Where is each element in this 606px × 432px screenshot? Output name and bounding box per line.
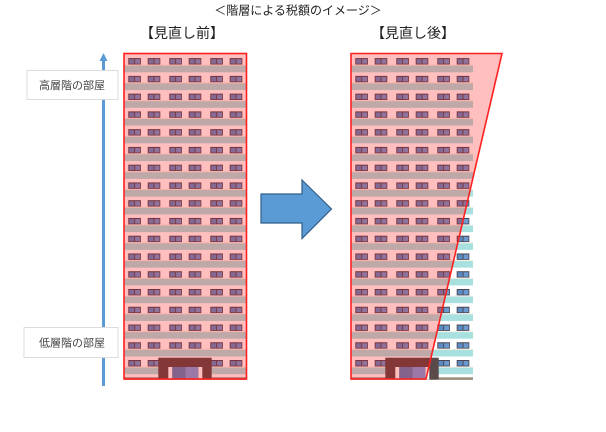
label: high floor room <box>27 70 118 100</box>
tax overlay: uniform rectangle <box>124 54 246 379</box>
heading: after revision: 【見直し後】 <box>371 25 455 41</box>
label: low floor room: 低層階の部屋 <box>39 336 105 350</box>
vertical floor-height arrow <box>100 53 108 386</box>
panel: building after revision <box>351 54 502 380</box>
panel: building before revision <box>124 54 246 380</box>
tax overlay: slanted shape <box>351 54 502 379</box>
label: low floor room <box>24 328 118 358</box>
building illustration: after <box>351 58 473 380</box>
heading: before revision: 【見直し前】 <box>140 25 224 41</box>
label: high floor room: 高層階の部屋 <box>39 78 105 92</box>
building illustration: before <box>124 58 246 380</box>
title: ＜階層による税額のイメージ＞ <box>214 4 382 18</box>
arrow: before to after <box>261 180 332 238</box>
